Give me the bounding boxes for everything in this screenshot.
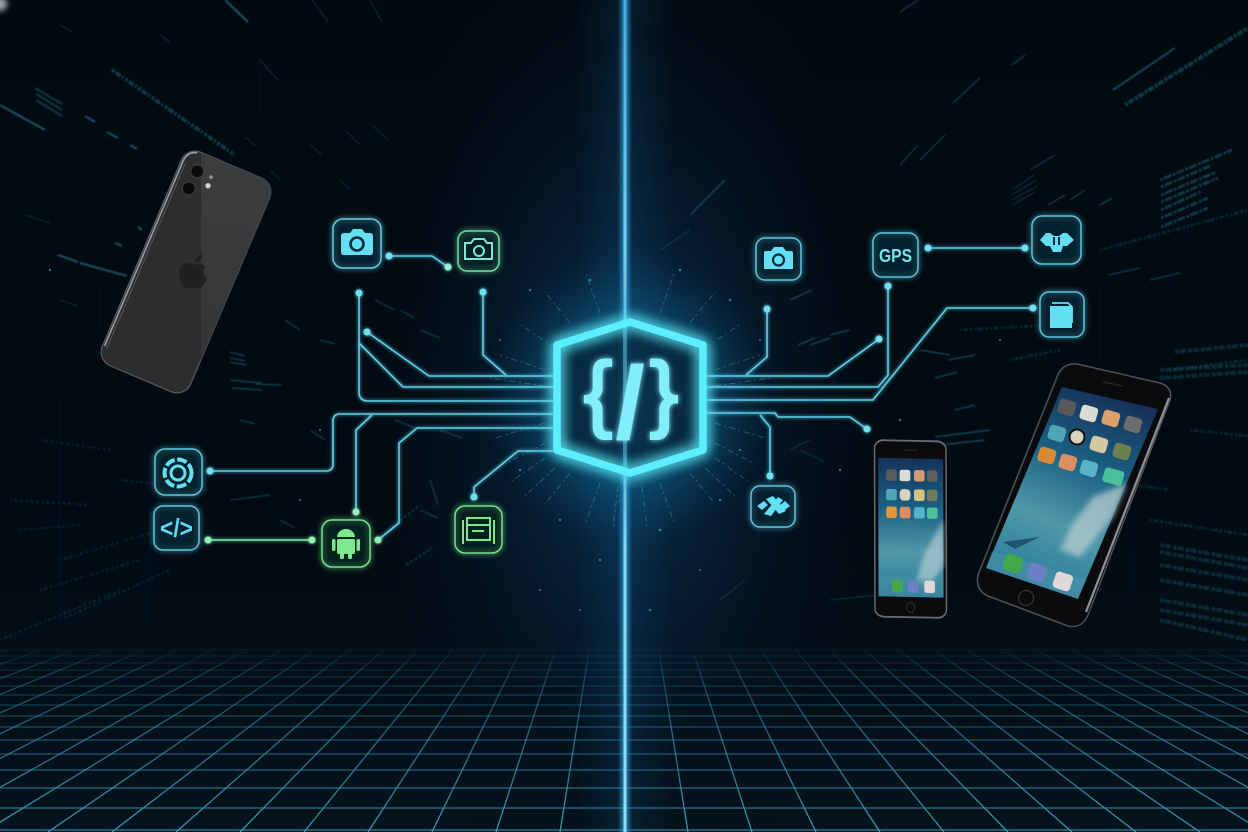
background particles around the centre (49, 269, 1001, 611)
wallpaper cloud (1060, 483, 1127, 557)
icon: green camera (458, 231, 499, 271)
camera lenses (180, 162, 216, 202)
code symbol: } (650, 345, 678, 439)
icon: robot face (1032, 216, 1081, 264)
icon: code tag: </> (160, 513, 193, 543)
icon: GPS (873, 233, 918, 277)
icon: right camera (756, 238, 801, 280)
code symbol (584, 345, 678, 460)
icon: gear ring (155, 449, 202, 495)
background data streams: right (660, 0, 1248, 640)
central hexagon code hub (557, 322, 703, 473)
icon: android (322, 520, 370, 567)
grid floor cross lines (0, 650, 1248, 830)
code symbol: / (616, 346, 644, 460)
vertical light beam (575, 0, 675, 832)
app icons (1002, 398, 1143, 592)
icon: GPS: GPS (879, 246, 912, 266)
icon: green chip (455, 506, 502, 553)
perspective grid floor (0, 645, 1248, 832)
apple logo (178, 254, 208, 289)
central glow and rays (480, 248, 780, 548)
background data streams: left (0, 0, 462, 640)
code symbol: { (584, 345, 612, 439)
icon: code tag (154, 506, 199, 550)
phone: black rear view (57, 0, 545, 544)
icon: document (1040, 292, 1084, 337)
connector lines: right (707, 248, 1033, 476)
phone: large tilted (977, 364, 1171, 627)
connector end dots (204, 244, 1036, 544)
icon: blue camera (333, 219, 381, 268)
phone: small upright (874, 440, 946, 618)
icon: crossed diamonds (751, 486, 795, 527)
connector lines: left (208, 256, 553, 540)
